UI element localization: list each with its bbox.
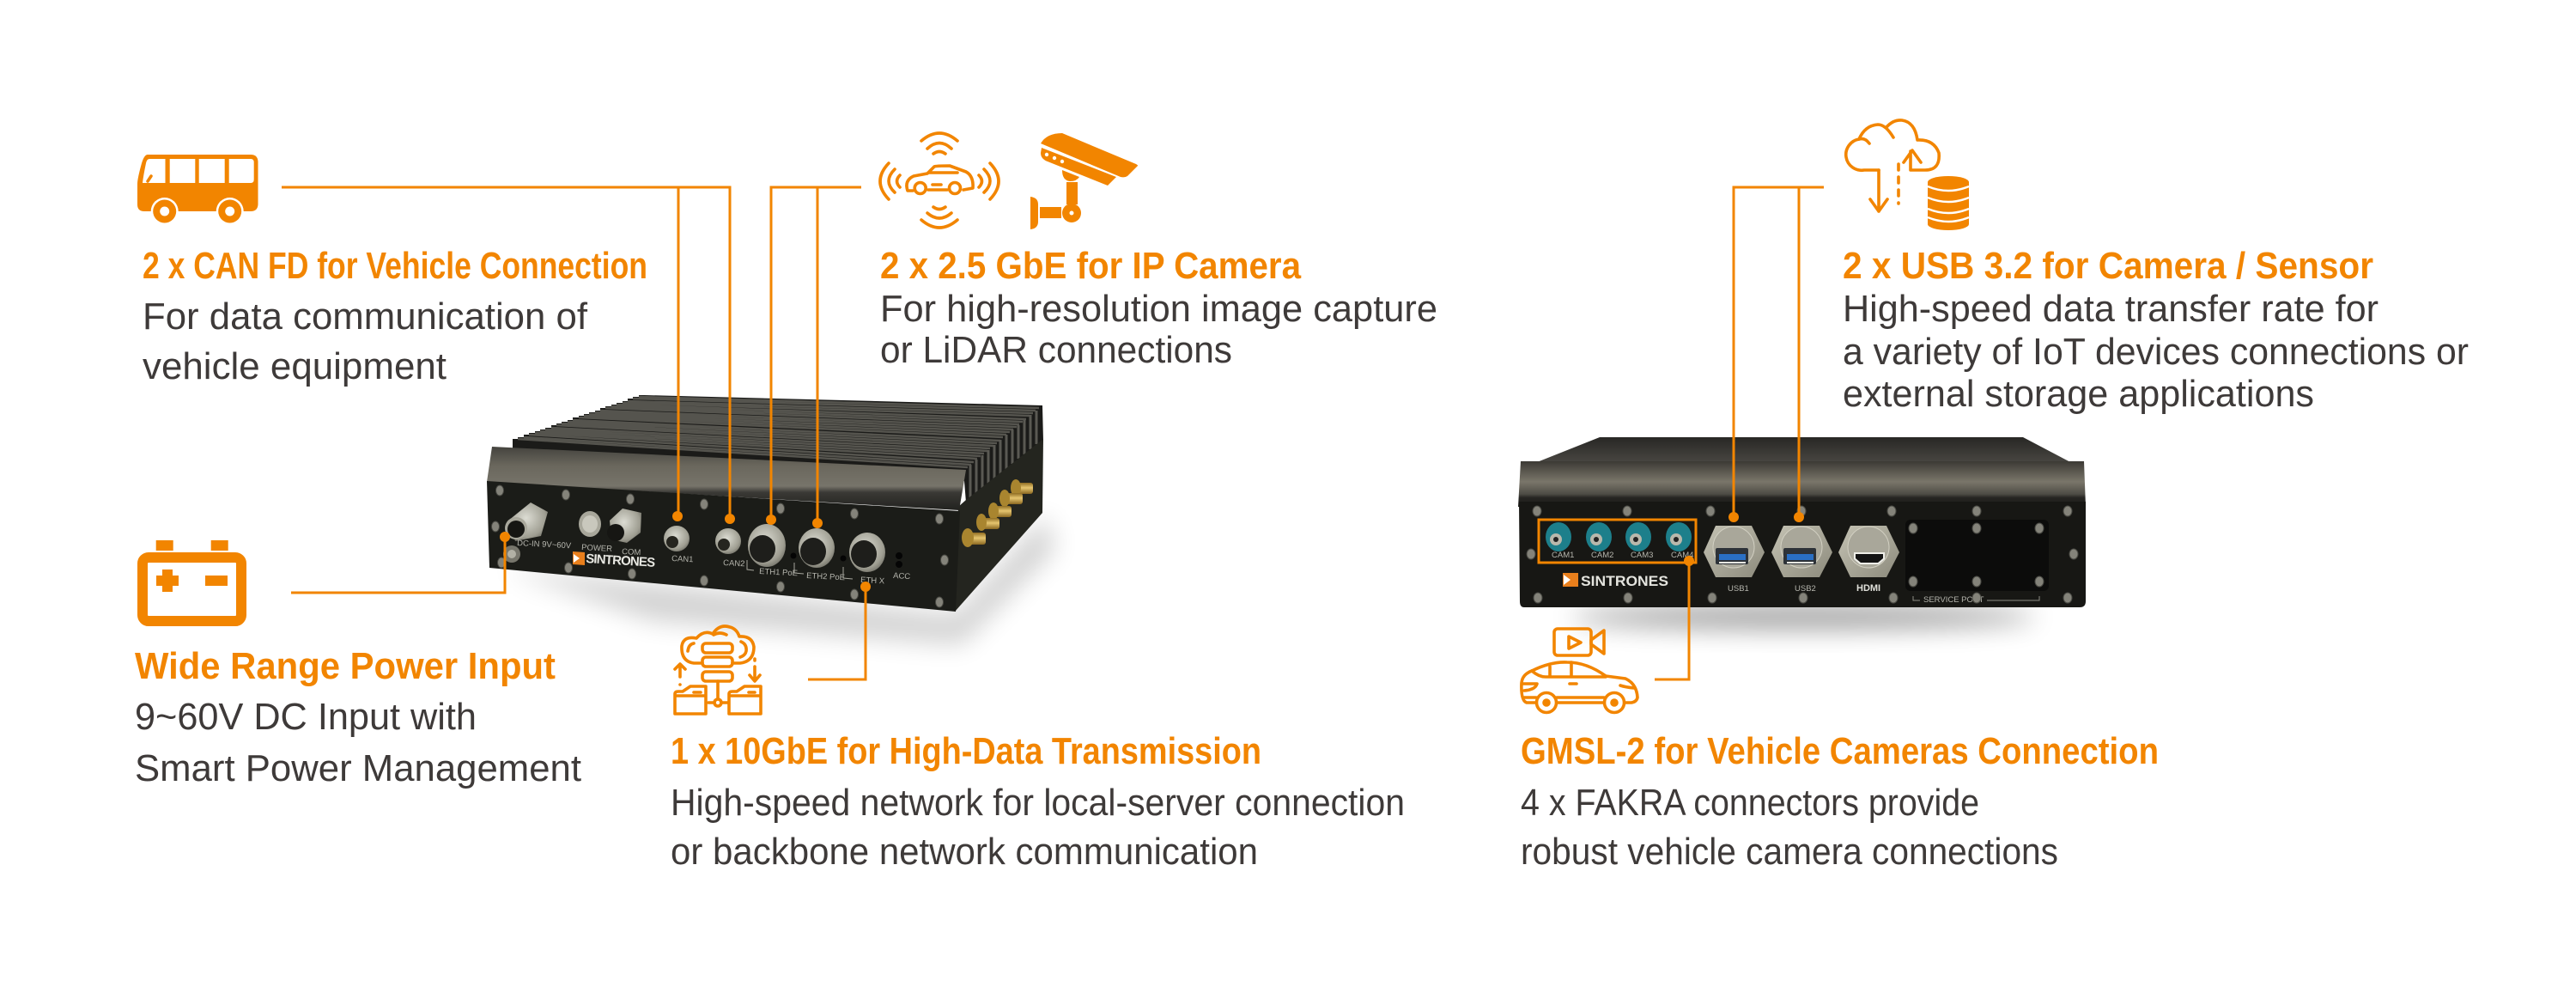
description: High-speed data transfer rate for (1843, 288, 2379, 330)
description (135, 696, 581, 789)
description (880, 288, 1437, 371)
antenna connectors (962, 479, 1033, 547)
port labels: ETH1 PoE (759, 567, 798, 578)
heading: 2 x CAN FD for Vehicle Connection (143, 245, 647, 287)
icon: database (1928, 176, 1969, 230)
FAKRA connector: CAM1 (1546, 522, 1571, 551)
description (143, 295, 588, 387)
heading: 1 x 10GbE for High-Data Transmission (671, 730, 1261, 772)
panel: power input (135, 540, 581, 789)
icon: server cloud (675, 626, 761, 714)
heading: Wide Range Power Input (135, 645, 556, 687)
port labels: HDMI (1856, 583, 1880, 594)
camera port labels: CAM2 (1591, 551, 1613, 560)
USB1 port (1704, 526, 1765, 577)
description: external storage applications (1843, 373, 2314, 415)
description: 9~60V DC Input with (135, 696, 477, 738)
port labels: CAN1 (671, 554, 694, 564)
panel: 2.5 GbE (880, 133, 1437, 371)
description: Smart Power Management (135, 747, 581, 789)
HDMI port (1838, 526, 1899, 577)
camera port labels: CAM4 (1671, 551, 1693, 560)
LEDs (790, 552, 902, 568)
port labels: DC-IN 9V~60V (517, 539, 572, 551)
brand logo: SINTRONES (586, 551, 656, 570)
shadow: left device (502, 515, 1054, 644)
port labels (1728, 583, 1880, 594)
camera port labels: CAM3 (1631, 551, 1653, 560)
description: or backbone network communication (671, 831, 1258, 873)
port labels: COM (622, 547, 641, 557)
description: robust vehicle camera connections (1521, 831, 2058, 873)
heading: 2 x USB 3.2 for Camera / Sensor (1843, 245, 2373, 287)
heatsink fins (513, 395, 1043, 502)
port labels: ETH2 PoE (806, 571, 845, 582)
callout leader lines: right device (1539, 187, 1824, 679)
description: For high-resolution image capture (880, 288, 1437, 330)
port labels: POWER (581, 543, 612, 554)
service port plate (1905, 520, 2049, 605)
panel: USB 3.2 (1843, 120, 2469, 415)
description: a variety of IoT devices connections or (1843, 331, 2469, 373)
FAKRA connector: CAM4 (1666, 522, 1692, 551)
side face (955, 439, 1043, 612)
icon: cloud transfer (1846, 120, 1939, 211)
icon: connected car (880, 133, 999, 228)
description: High-speed network for local-server connection (671, 782, 1405, 824)
panel: 10GbE (671, 626, 1405, 873)
icon: surveillance camera (1030, 133, 1138, 229)
description: For data communication of (143, 295, 588, 338)
heading: GMSL-2 for Vehicle Cameras Connection (1521, 730, 2159, 772)
panel screws (491, 485, 948, 607)
device: right rear view (1518, 437, 2086, 607)
connector: ETH2 (799, 528, 835, 568)
description (671, 782, 1405, 873)
description (1521, 782, 2058, 873)
description (1843, 288, 2469, 415)
brand logo: SINTRONES (1581, 573, 1668, 589)
heading: 2 x 2.5 GbE for IP Camera (880, 245, 1301, 287)
rear panel (1519, 502, 2086, 607)
device: left front view (487, 395, 1043, 612)
port labels: USB1 (1728, 584, 1749, 594)
port labels: CAN2 (723, 558, 745, 569)
icon: bus (137, 155, 258, 225)
camera port labels: CAM1 (1552, 551, 1574, 560)
front panel (487, 481, 960, 612)
panel: GMSL-2 (1521, 629, 2159, 873)
silver top band (487, 447, 966, 510)
description: 4 x FAKRA connectors provide (1521, 782, 1979, 824)
icon: car with video camera (1522, 629, 1637, 713)
callout leader lines: left device (282, 187, 871, 679)
connector: ETH X (849, 533, 885, 572)
connector: DC in (503, 502, 548, 563)
icon: battery (143, 540, 241, 621)
service port plate: SERVICE PORT (1923, 595, 1984, 605)
panel screws (1527, 506, 2078, 603)
connector: CAN2 (715, 528, 741, 554)
port labels: ETH X (860, 576, 885, 586)
camera port labels (1552, 551, 1693, 560)
shadow: right device (1571, 605, 2035, 629)
port labels (517, 539, 911, 586)
description: or LiDAR connections (880, 329, 1232, 371)
FAKRA connector: CAM2 (1586, 522, 1612, 551)
connector: CAN1 (664, 526, 690, 551)
description: vehicle equipment (143, 345, 447, 387)
silver band (1518, 461, 2086, 507)
panel: CAN FD (137, 155, 647, 387)
connector: COM (607, 509, 641, 543)
top plate (1533, 437, 2074, 464)
connector: ETH1 (748, 524, 786, 567)
USB2 port (1771, 526, 1832, 577)
connector: power button (579, 511, 601, 537)
FAKRA connector: CAM3 (1625, 522, 1651, 551)
port labels: ACC (893, 571, 911, 582)
port labels: USB2 (1795, 584, 1816, 594)
